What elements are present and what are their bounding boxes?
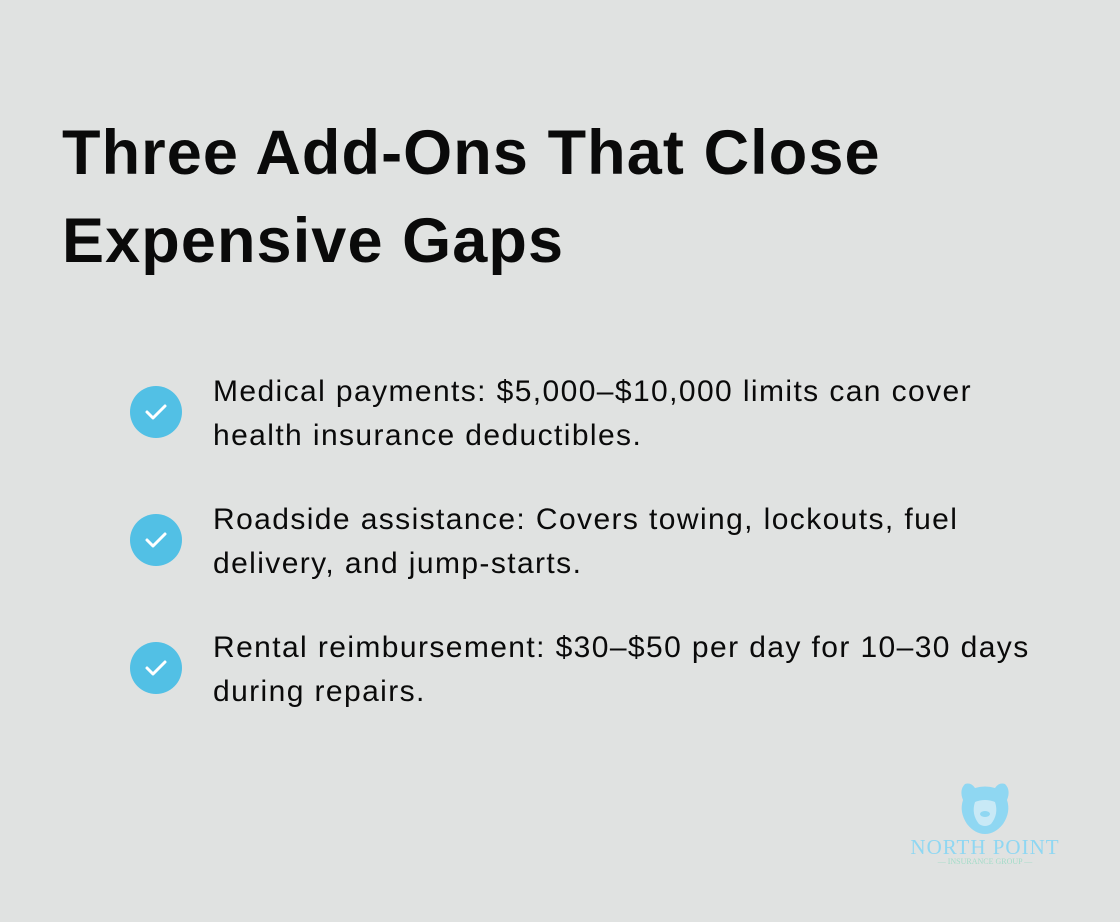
title: Three Add-Ons That Close	[62, 118, 881, 188]
text: roadside assistance	[213, 503, 958, 580]
text: roadside assistance: delivery, and jump-starts.	[213, 547, 582, 580]
text: brand: NORTH POINT	[910, 835, 1060, 859]
title: Expensive Gaps	[62, 206, 564, 276]
icon: check	[130, 642, 182, 694]
item: rental reimbursement	[130, 631, 1030, 708]
text: medical payments: Medical payments: $5,000–$10,000 limits can cover	[213, 375, 972, 408]
logo	[910, 784, 1060, 866]
icon: check	[130, 386, 182, 438]
title	[62, 118, 881, 276]
text: rental reimbursement	[213, 631, 1030, 708]
text: medical payments	[213, 375, 972, 452]
item: medical payments	[130, 375, 972, 452]
text: roadside assistance: Roadside assistance: Covers towing, lockouts, fuel	[213, 503, 958, 536]
icon: check	[130, 514, 182, 566]
logo: — INSURANCE GROUP —	[938, 857, 1032, 866]
text: medical payments: health insurance deductibles.	[213, 419, 642, 452]
text: rental reimbursement: during repairs.	[213, 675, 426, 708]
item: roadside assistance	[130, 503, 958, 580]
icon: bear	[961, 784, 1009, 834]
text: rental reimbursement: Rental reimbursement: $30–$50 per day for 10–30 days	[213, 631, 1030, 664]
